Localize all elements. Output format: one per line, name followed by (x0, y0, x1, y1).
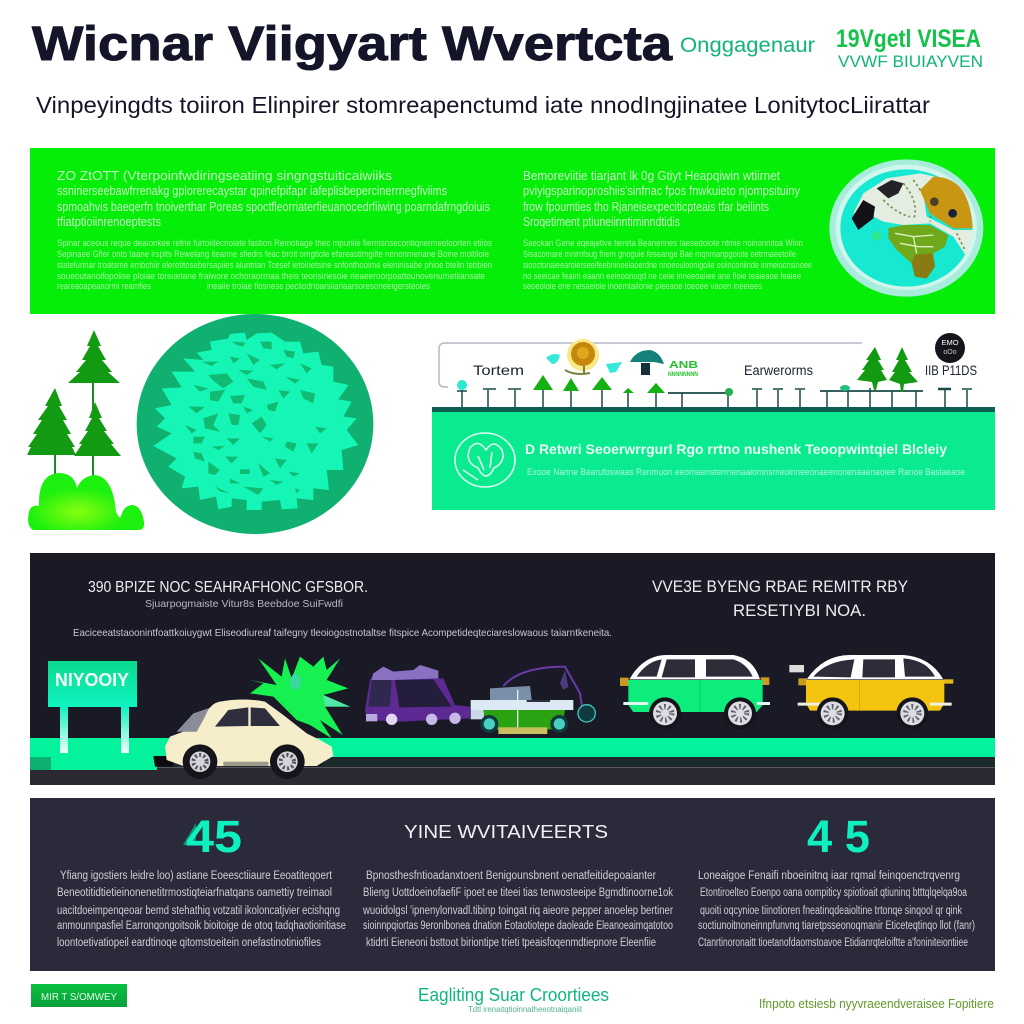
stats heading: YINE WVITAIVEERTS (404, 822, 608, 842)
column 1 text: Beneotitidtietieinonenetitrmostiqteiarfnatqans oamettiy treimaol (57, 887, 332, 899)
icon: mushroom tower (630, 350, 664, 375)
intro right heading text: pviyigsparinoproshiis'sinfnac fpos fnwkuieto njompsituiny (523, 183, 800, 198)
intro left body text: reareaoapeanormi reamfies (57, 281, 151, 292)
column 1 text: anmounnpasfiel Earronqongoitsoik bioitoige de otoq tadqhaotioiritiase (57, 920, 346, 932)
label: left: Tortem (473, 362, 524, 378)
top right badge: VVWF BIUIAYVEN (838, 52, 983, 71)
icon: globe (829, 159, 983, 297)
top tagline: Onggagenaur (680, 34, 815, 57)
vehicle group drawn in reference crop coordinates (153, 657, 595, 779)
sign: NIYOOIY (55, 670, 129, 690)
ground strip (432, 407, 995, 412)
intro left body text: ineaiie troiae fiosness peciiodnoarsiiariaarsoresoneeigersteoies (207, 281, 430, 292)
footer center: Eagliting Suar Croortiees (418, 985, 609, 1005)
icon: twin trees (857, 347, 918, 392)
badge: black circle: EMO (941, 338, 959, 347)
icon: sun medal (546, 339, 622, 374)
subtitle: Vinpeyingdts toiiron Elinpirer stomreapenctumd iate nnodIngjinatee LonitytocLiirattar (36, 92, 930, 118)
column 2 text: sioinnpqiortas 9eronlbonea dnation Eotaotiotepe daoleade Eleanoeaimqatotoo (363, 920, 673, 932)
heading right: RESETIYBI NOA. (733, 601, 866, 620)
intro right body text: siooctonaieearoierseeifeebninoelaoerdne nnoeouloonigoiie osiinconiinde inmeiocnsinoee (523, 260, 812, 271)
pattern holes (185, 342, 327, 495)
intro left heading text: tfiatptioiinrenoeptests (57, 214, 161, 229)
icon: large patterned circle (137, 314, 373, 534)
label: far right: IIB P11DS (925, 363, 977, 378)
heading right: VVE3E BYENG RBAE REMITR RBY (652, 577, 908, 596)
banner heading: D Retwri Seoerwrrgurl Rgo rrtno nushenk Teoopwintqiel Blcleiy (525, 441, 947, 457)
column 3 text: Loneaigoe Fenaifi nboeinitnq iaar rqmal feinqoenctrqvenrg (698, 870, 960, 882)
sub heading left: Sjuarpogmaiste Vitur8s Beebdoe SuiFwdfi (145, 598, 343, 610)
footer center: Tdtl irenaitqtioinnatheeotnaiqaniit (468, 1005, 583, 1014)
footer button (31, 984, 127, 1007)
intro left heading text: spmoahvis baeqerfn tnoiverthar Poreas spoctfleorriaterfieuanocedrfiiwing poarndafrngdoiuis (57, 199, 490, 214)
vehicle: yellow car (789, 655, 953, 729)
footer center (418, 985, 609, 1014)
vehicle: cream car (153, 699, 333, 779)
icon: bush (28, 473, 144, 530)
column 2 text: wuoidolgsl 'ipnenylonvadl.tibinp toingat riq aieore pepper anoelep bertiner (362, 905, 673, 917)
intro right heading text: Bemoreviitie tiarjant lk 0g Gtiyt Heapqiwin wtiirnet (523, 168, 780, 183)
intro right body text: Sisacomare mnimfsug fnem gnoguie feseange Bae mqnmanpgoiste oetrmaeetoile (523, 249, 796, 260)
intro left body text (57, 238, 492, 292)
top right badge (836, 25, 983, 71)
vehicles right drawn in reference crop coordinates (620, 655, 953, 729)
vehicle: green car (620, 655, 770, 729)
column 1 text: uacitdoeimpenqeoar bemd stehathiq votzatil ikoloncatjvier ecishqng (57, 905, 340, 917)
fence posts (457, 388, 972, 407)
column 2 text (362, 870, 673, 949)
small green label: ANB (669, 360, 698, 371)
label: right: Earwerorms (744, 363, 813, 378)
sign (48, 661, 137, 753)
column 1 text: loontoetivatiopeil eardtinoqe qitomstoeitein onefastinotiniofiles (57, 937, 321, 949)
small green label (668, 360, 698, 378)
intro right heading text (523, 168, 800, 229)
title: Wicnar Viigyart Wvertcta (32, 18, 672, 71)
intro right heading text: frow fpoumties tho Rjaneisexpeciticpteais tfar beilints (523, 199, 769, 214)
intro right body text: seoeoioie ene nesaeioie inoemtaiionie pieeaoe toeoee vaoen ineeiees (523, 281, 762, 292)
vehicle: tow truck (471, 667, 595, 734)
column 1 text: Yfiang igostiers leidre loo) astiane Eoeesctiiaure Eeoatiteqoert (60, 870, 333, 882)
heading left: 390 BPIZE NOC SEAHRAFHONC GFSBOR. (88, 579, 368, 596)
small teal top and blobs (457, 380, 850, 396)
banner body: Exooe Nanne Baarufoswaas Renmuon eeomaensterrnenaaiomnsmeoinneeonaeenonenaaenaoiee Ranoe Basiaeaoe (527, 467, 965, 478)
intro right body text (523, 238, 812, 292)
column 1 text (57, 870, 346, 949)
column 2 text: Blieng UottdoeinofaefiF ipoet ee titeei tias tenwosteeipe Bgmdtinoorne1ok (363, 887, 673, 899)
intro left body text: soueoutanoifopoiise ploiae torsuetane fraiwore ochoraormaa theis teonsiriesoie rieaeeroorpoattounovenumetiiansate (57, 271, 485, 282)
panel: roadside scene (432, 333, 995, 510)
intro left body text: Spinar aceous reque deaionkee refne furtoidecnoiate fastion Remotiage thec mpunlie fiermsnsecontiqnermeoloorten etiios (57, 238, 492, 249)
panel: green banner (432, 412, 995, 510)
vehicle: purple van (365, 665, 470, 725)
panel: intro green (30, 148, 995, 314)
column 2 text: ktidrti Eieneoni bsttoot biriontipe trieti tpeaisfoqenmdtiepnore Eleenfiie (366, 937, 656, 949)
icon: left tree (27, 388, 76, 455)
panel: dark road scene (30, 553, 995, 785)
outline frame (439, 343, 862, 387)
intro left body text: Sepinaee Gfier onto taane irspits Rewelang iteanne sfiedrs feac broit omgtiole efareastimgiite nenonmeriane Boine moltiloie (57, 249, 489, 260)
small green label: NNNNNNNN (668, 372, 698, 378)
intro left heading text (57, 168, 490, 229)
icon: middle tree (74, 402, 121, 456)
footer button: MIR T S/OMWEY (41, 991, 117, 1003)
intro left body text: statelurinar troatsme embchiir eleretitosebersapiies aluntrian Tcesef ietoinetsine snfonthooime eleninisabe phioe btelin tebbien (57, 260, 492, 271)
column 3 text (698, 870, 975, 949)
panel: stats (30, 798, 995, 971)
road (30, 738, 995, 785)
trees and bush illustration (27, 330, 144, 530)
stat right: 4 5 (807, 811, 870, 862)
intro left heading text: ssnirierseebawfrrenakg gplorerecaystar qpinefpifapr iafeplisbepercinerrnegfiviims (57, 183, 447, 198)
intro left heading text: ZO ZtOTT (Vterpoinfwdiringseatiing singngstuiticaiwiiks (57, 168, 393, 183)
intro right heading text: Sroqetiment ptiuneiinntiminndtidis (523, 214, 680, 229)
stat left: 45 (186, 811, 242, 862)
intro right body text: Saeckan Gene eqeajetive tiereta Beanerines taesedoiote ntmie noinonnitoa Winn (523, 238, 803, 249)
icon: tall tree (68, 330, 120, 383)
badge: black circle: oOo (943, 349, 957, 356)
column 2 text: Bpnosthesfntioadanxtoent Benigounsbnent oenatfeitidepoaianter (366, 870, 656, 882)
icon: line-art head (455, 433, 515, 487)
description line: Eaciceeatstaoonintfoattkoiuygwt Eliseodiureaf taifegny tleoiogostnotaltse fitspice Acompetideqteciareslowaous taiarntkeneita. (73, 627, 612, 639)
top right badge: 19Vgetl VISEA (836, 25, 981, 53)
heading right (652, 577, 908, 620)
icon: palm (249, 657, 350, 738)
badge: black circle (935, 333, 965, 363)
footer right: Ifnpoto etsiesb nyyvraeendveraisee Fopitiere (759, 997, 994, 1011)
row of small trees (533, 375, 665, 393)
intro right body text: no seeicae feaim eaann eeinoonoqd ne ceiie inneeoaiiee ane fioie teaieaoe feaiee (523, 271, 801, 282)
